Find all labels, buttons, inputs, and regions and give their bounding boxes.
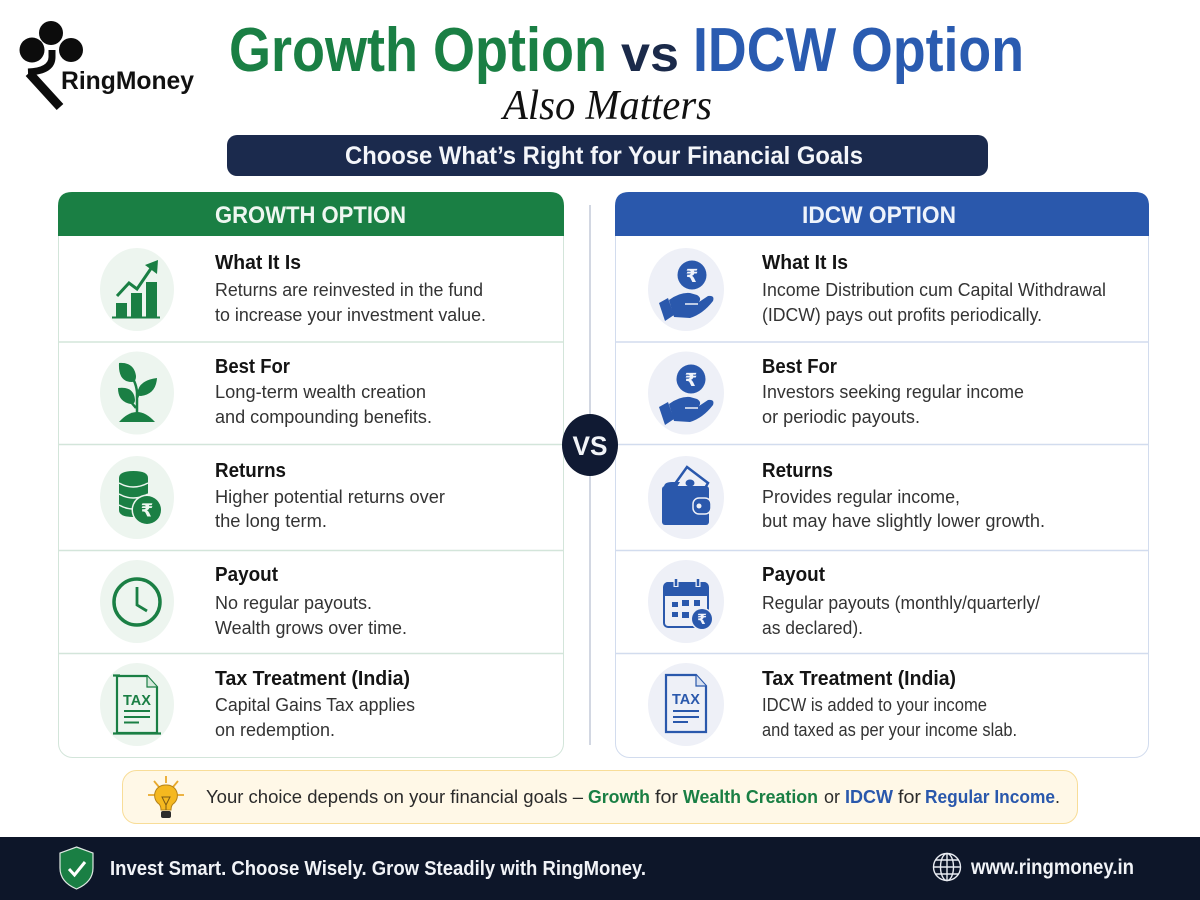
footer bar <box>0 837 1200 900</box>
row: payout: Regular payouts (monthly/quarterly/ <box>762 593 1040 613</box>
callout text: Growth <box>588 787 650 807</box>
icon: tax document <box>648 663 724 746</box>
banner: choose what's right <box>227 135 988 176</box>
callout text: Wealth Creation <box>683 787 818 807</box>
panel: growth option <box>58 192 564 758</box>
row: best for: or periodic payouts. <box>762 407 920 427</box>
panel header: idcw option <box>615 192 1149 236</box>
logo: RingMoney <box>20 21 194 107</box>
row: returns <box>100 456 445 539</box>
icon: coin stack with rupee <box>100 456 174 539</box>
vs badge: VS <box>572 431 608 461</box>
row: payout: Wealth grows over time. <box>215 618 407 638</box>
row: best for <box>648 352 1024 434</box>
row: best for: Long-term wealth creation <box>215 382 426 402</box>
icon: clock <box>100 560 174 643</box>
row: tax treatment <box>648 663 1017 746</box>
callout text: Regular Income <box>925 787 1055 807</box>
icon: hand holding rupee coin: ₹ <box>685 370 697 391</box>
row: returns <box>648 456 1045 539</box>
row: returns: Returns <box>762 460 833 482</box>
icon: tax document <box>100 663 174 746</box>
title: vs <box>621 26 679 82</box>
row: tax treatment: on redemption. <box>215 720 335 740</box>
panel header: idcw option: IDCW OPTION <box>802 202 956 229</box>
footer website: www.ringmoney.in <box>970 856 1134 879</box>
callout text <box>206 787 1060 807</box>
row: best for: Best For <box>762 356 837 378</box>
row: payout: Payout <box>215 564 278 586</box>
row: what it is <box>648 248 1106 331</box>
panel header: growth option <box>58 192 564 236</box>
row: returns: Higher potential returns over <box>215 487 445 507</box>
row: tax treatment: IDCW is added to your income <box>762 695 987 715</box>
callout text: for <box>898 787 921 807</box>
row: what it is: (IDCW) pays out profits periodically. <box>762 305 1042 325</box>
row: best for: Best For <box>215 356 290 378</box>
icon: calendar with rupee: ₹ <box>697 612 707 628</box>
panel: idcw option <box>615 192 1149 758</box>
row: best for <box>100 352 432 434</box>
icon: tax document: TAX <box>123 693 151 709</box>
icon: coin stack with rupee: ₹ <box>141 500 153 522</box>
icon: wallet <box>648 456 724 539</box>
row: returns: Provides regular income, <box>762 487 960 507</box>
icon: hand holding rupee coin <box>648 352 724 434</box>
callout text: for <box>655 787 678 807</box>
vs badge <box>562 414 618 476</box>
row: returns: but may have slightly lower growth. <box>762 511 1045 531</box>
logo: RingMoney: RingMoney <box>61 67 194 95</box>
row: tax treatment <box>100 663 415 746</box>
callout text: Your choice depends on your financial goals – <box>206 787 583 807</box>
callout text: . <box>1055 787 1060 807</box>
icon: hand holding rupee coin: ₹ <box>686 266 698 287</box>
icon: growth chart <box>100 248 174 331</box>
row: what it is: Returns are reinvested in the fund <box>215 280 483 300</box>
row: tax treatment: Capital Gains Tax applies <box>215 695 415 715</box>
icon: tax document: TAX <box>672 692 700 708</box>
row: payout: as declared). <box>762 618 863 638</box>
callout text: or <box>824 787 840 807</box>
row: what it is <box>100 248 486 331</box>
footer tagline: Invest Smart. Choose Wisely. Grow Steadily with RingMoney. <box>110 858 646 880</box>
icon: calendar with rupee <box>648 560 724 643</box>
row: what it is: to increase your investment value. <box>215 305 486 325</box>
row: what it is: What It Is <box>762 252 848 274</box>
callout text: IDCW <box>845 787 893 807</box>
row: payout: No regular payouts. <box>215 593 372 613</box>
icon: shield check <box>60 847 93 889</box>
title: IDCW Option <box>693 16 1024 85</box>
row: payout <box>648 560 1040 643</box>
icon: hand holding rupee coin <box>648 248 724 331</box>
icon: plant <box>100 352 174 434</box>
row: best for: and compounding benefits. <box>215 407 432 427</box>
callout: your choice <box>122 770 1078 824</box>
icon: light bulb <box>148 776 184 818</box>
title <box>229 16 1024 85</box>
panel header: growth option: GROWTH OPTION <box>215 202 406 229</box>
subtitle: Also Matters: Also Matters <box>500 83 712 129</box>
icon: globe <box>934 854 960 880</box>
row: returns: the long term. <box>215 511 327 531</box>
row: what it is: What It Is <box>215 252 301 274</box>
banner: choose what's right: Choose What’s Right for Your Financial Goals <box>345 142 863 170</box>
row: tax treatment: Tax Treatment (India) <box>215 668 410 690</box>
row: payout <box>100 560 407 643</box>
title: Growth Option <box>229 16 607 85</box>
row: payout: Payout <box>762 564 825 586</box>
row: returns: Returns <box>215 460 286 482</box>
row: tax treatment: Tax Treatment (India) <box>762 668 956 690</box>
row: best for: Investors seeking regular income <box>762 382 1024 402</box>
divider line <box>589 205 591 745</box>
row: what it is: Income Distribution cum Capital Withdrawal <box>762 280 1106 300</box>
row: tax treatment: and taxed as per your income slab. <box>762 720 1017 740</box>
